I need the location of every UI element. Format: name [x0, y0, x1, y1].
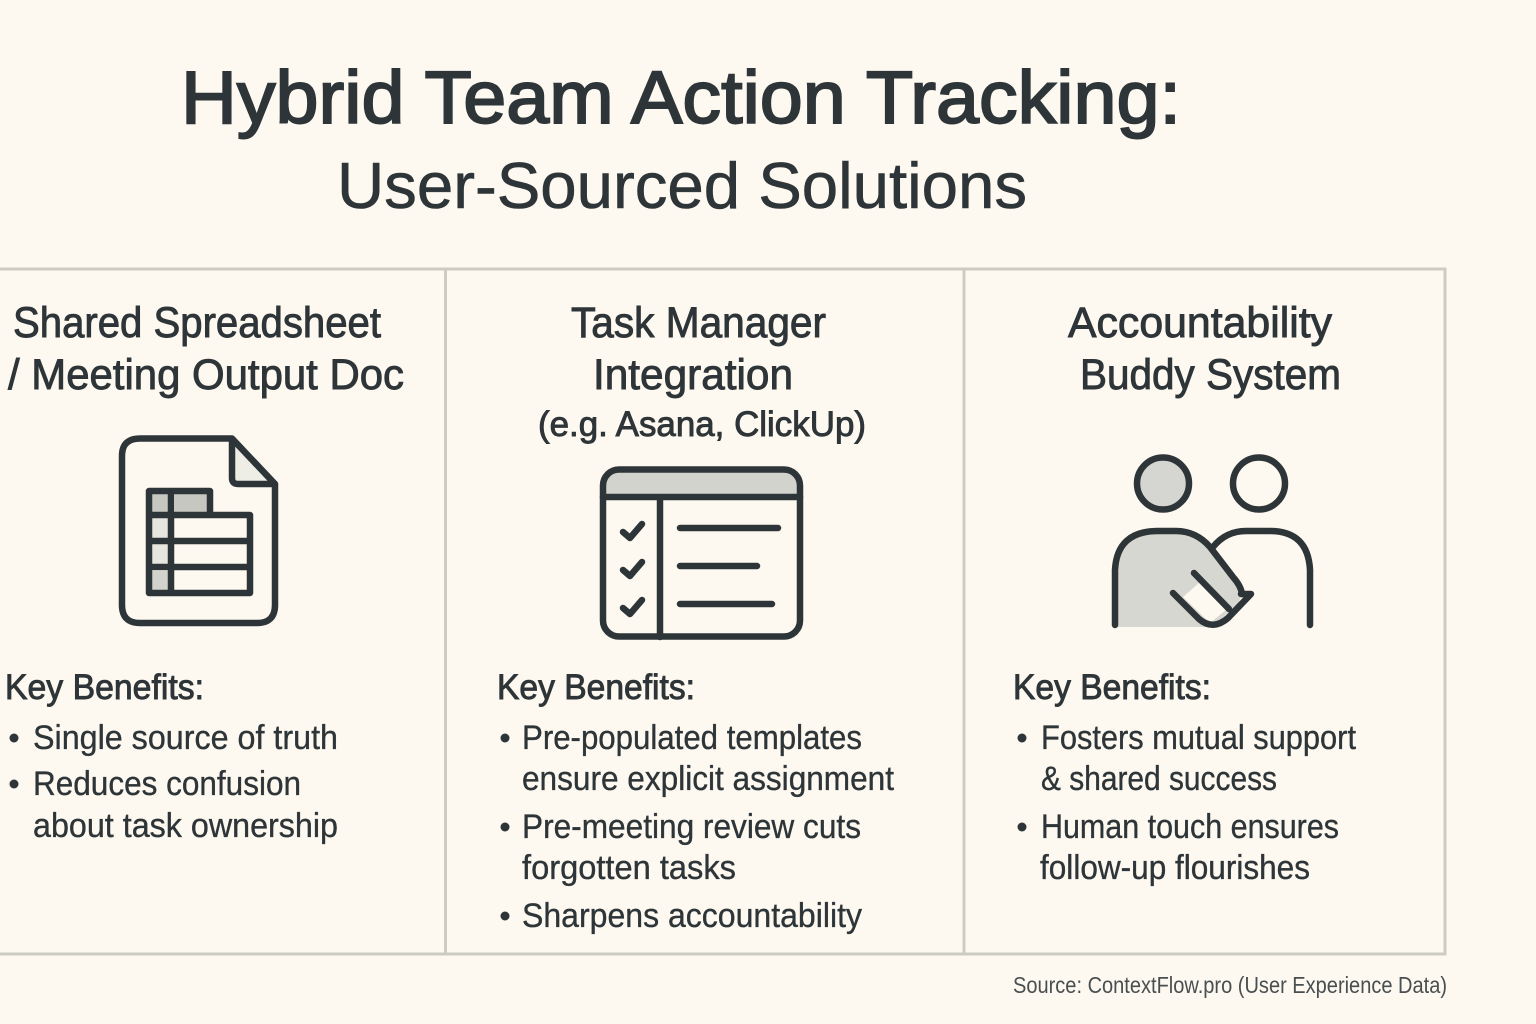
key benefits list: Pre-meeting review cuts	[522, 808, 861, 846]
heading: shared spreadsheet: Shared Spreadsheet	[13, 299, 381, 347]
icon: two people with supportive arm	[1115, 458, 1310, 627]
heading: shared spreadsheet	[8, 299, 404, 399]
key benefits list	[5, 668, 338, 845]
heading: accountability buddy: Buddy System	[1080, 351, 1341, 399]
key benefits list: Human touch ensures	[1041, 808, 1339, 846]
panel: accountability buddy system	[1013, 299, 1357, 887]
key benefits list: about task ownership	[33, 807, 338, 845]
title: Hybrid Team Action Tracking:	[181, 56, 1181, 139]
key benefits list: forgotten tasks	[522, 849, 736, 887]
icon: task window with checklist	[603, 470, 800, 637]
key benefits list: Fosters mutual support	[1041, 719, 1357, 757]
heading: accountability buddy: Accountability	[1068, 299, 1332, 347]
key benefits list: Reduces confusion	[33, 765, 301, 803]
key benefits list: & shared success	[1041, 760, 1277, 798]
key benefits list	[1013, 668, 1357, 887]
key benefits list: Sharpens accountability	[522, 897, 862, 935]
key benefits list: Key Benefits:	[1013, 668, 1211, 707]
heading: shared spreadsheet: / Meeting Output Doc	[8, 351, 404, 399]
key benefits list: follow-up flourishes	[1040, 849, 1310, 887]
heading: task manager: Integration	[593, 351, 793, 399]
icon: spreadsheet document	[122, 438, 275, 623]
panel: task manager integration	[497, 299, 895, 935]
panel: shared spreadsheet	[5, 299, 404, 845]
heading: task manager: (e.g. Asana, ClickUp)	[538, 405, 866, 444]
heading: accountability buddy	[1068, 299, 1341, 399]
subtitle: User-Sourced Solutions	[337, 149, 1027, 222]
key benefits list	[497, 668, 895, 935]
comparison table frame	[0, 269, 1445, 954]
key benefits list: ensure explicit assignment	[522, 760, 895, 798]
heading: task manager	[538, 299, 866, 444]
key benefits list: Single source of truth	[33, 719, 338, 757]
key benefits list: Pre-populated templates	[522, 719, 862, 757]
title	[181, 56, 1181, 222]
source note: Source: ContextFlow.pro (User Experience Data)	[1013, 972, 1447, 998]
heading: task manager: Task Manager	[571, 299, 826, 347]
key benefits list: Key Benefits:	[497, 668, 695, 707]
key benefits list: Key Benefits:	[5, 668, 204, 707]
